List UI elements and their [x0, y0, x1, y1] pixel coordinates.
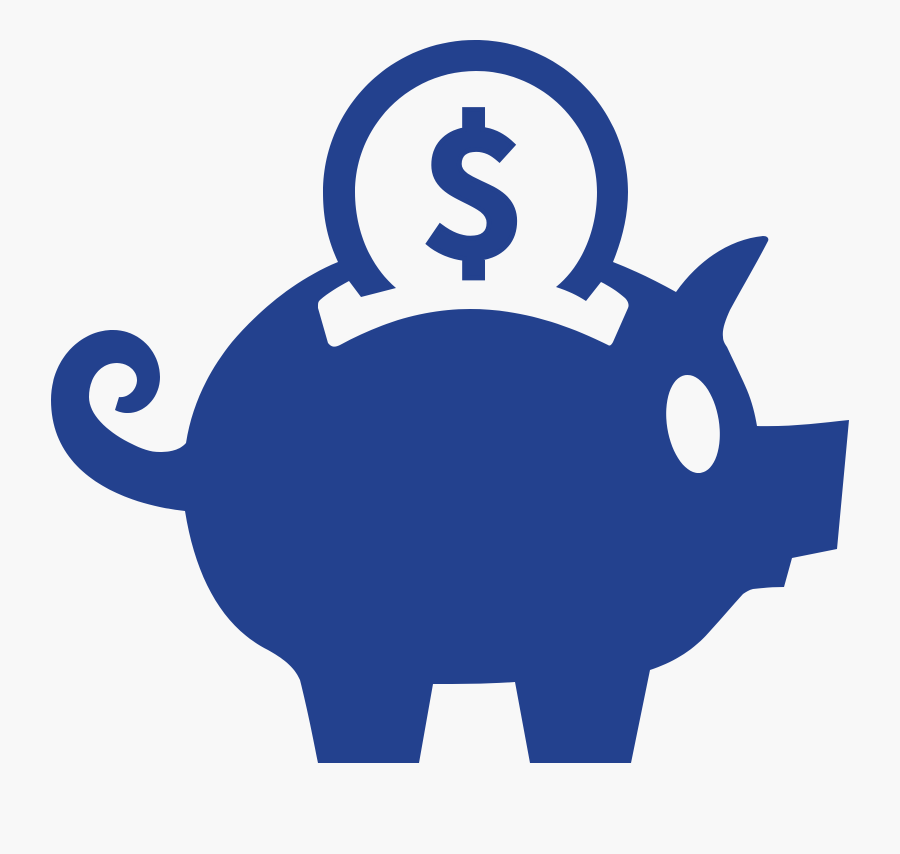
icon: dollar sign on coin: $ [420, 56, 527, 307]
pig body silhouette with tail, ear, snout and legs [51, 40, 849, 763]
eye [660, 371, 726, 477]
icon: piggy bank [51, 40, 849, 763]
coin interior and slot opening [318, 71, 629, 347]
